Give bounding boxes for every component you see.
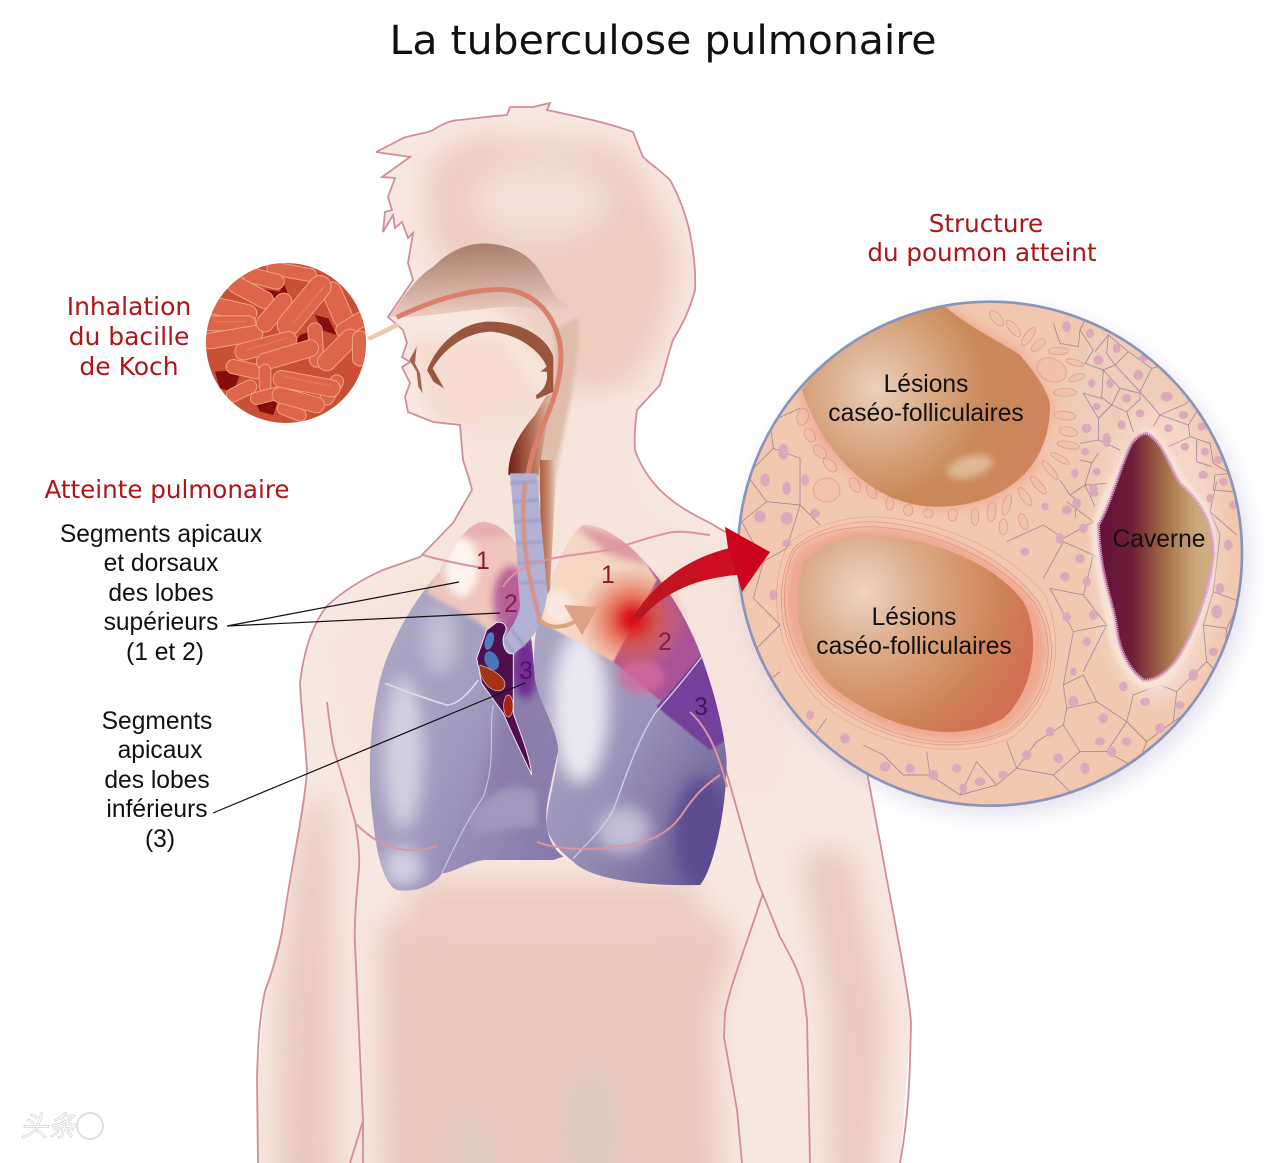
watermark [20,1111,103,1142]
label: upper lobe segments: et dorsaux [104,550,219,577]
label: lower lobe segments: (3) [145,826,175,853]
cell network [742,320,1240,795]
label: lower lobe segments: apicaux [118,737,203,764]
airways: nasal cavity, pharynx and air path [367,243,582,497]
lesion and cavern labels: Lésions [884,371,968,398]
lung segment numbers: 1 [601,562,615,589]
lesion and cavern labels: Caverne [1113,526,1205,553]
label: lower lobe segments: inférieurs [106,796,208,823]
trachea and bronchi [477,460,557,775]
lung segment numbers: 2 [504,591,518,618]
arrow head over circle edge [725,527,770,592]
arm shading [278,800,336,1163]
lesion: lower [798,535,1033,732]
lungs [370,522,727,890]
nasal cavity [390,243,582,340]
lung segment numbers: 2 [658,629,672,656]
nuclei [754,321,1237,793]
cavern [1098,433,1213,680]
lesion and cavern labels [816,371,1205,660]
neck passage [508,393,553,475]
lesion and cavern labels: caséo-folliculaires [828,400,1024,427]
human body silhouette [257,103,911,1163]
lung segment numbers: 3 [694,694,708,721]
bacteria magnified circle [206,263,366,423]
lesion: lower concentric layers [777,517,1056,749]
torso shading [380,920,735,1163]
cavern wall [1091,427,1216,690]
lung segment numbers [476,548,708,721]
lesion: upper [802,305,1050,507]
label: upper lobe segments: des lobes [108,580,214,607]
hilum cutaway [477,622,532,775]
label: upper lobe segments: (1 et 2) [126,639,204,666]
head shading [425,135,680,400]
label: lower lobe segments: des lobes [104,767,210,794]
lesion and cavern labels: Lésions [872,604,956,631]
label: upper lobe segments: supérieurs [104,609,218,636]
infection glow [578,564,688,674]
watermark: 头条 [20,1111,78,1142]
lung segment numbers: 3 [519,658,533,685]
title: La tuberculose pulmonaire [390,18,936,64]
magnified lung structure [738,302,1248,814]
heading: structure du poumon atteint: du poumon atteint [867,238,1097,267]
left lung [370,522,564,890]
throat shading [533,317,579,493]
lesion and cavern labels: caséo-folliculaires [816,633,1012,660]
heading: inhalation label: de Koch [79,352,179,381]
follicle cells [796,308,1085,535]
small arrow: spread to lesion [540,605,598,635]
heading: inhalation label: du bacille [69,322,189,351]
label: lower lobe segments: Segments [102,708,212,735]
leader lines [213,582,525,813]
heading: inhalation label: Inhalation [67,292,191,321]
teeth [409,347,423,393]
lung segment numbers: 1 [476,548,490,575]
heading: structure du poumon atteint: Structure [929,209,1043,238]
palate arch [427,322,553,399]
body lines over lungs [355,532,727,850]
heading: atteinte pulmonaire: Atteinte pulmonaire [44,475,290,504]
inhalation ray [367,323,399,341]
right lung [534,525,727,886]
label: upper lobe segments: Segments apicaux [60,521,263,548]
glow around lesions [802,308,1050,507]
big red arrow towards detail [633,527,770,620]
air path [397,289,561,497]
